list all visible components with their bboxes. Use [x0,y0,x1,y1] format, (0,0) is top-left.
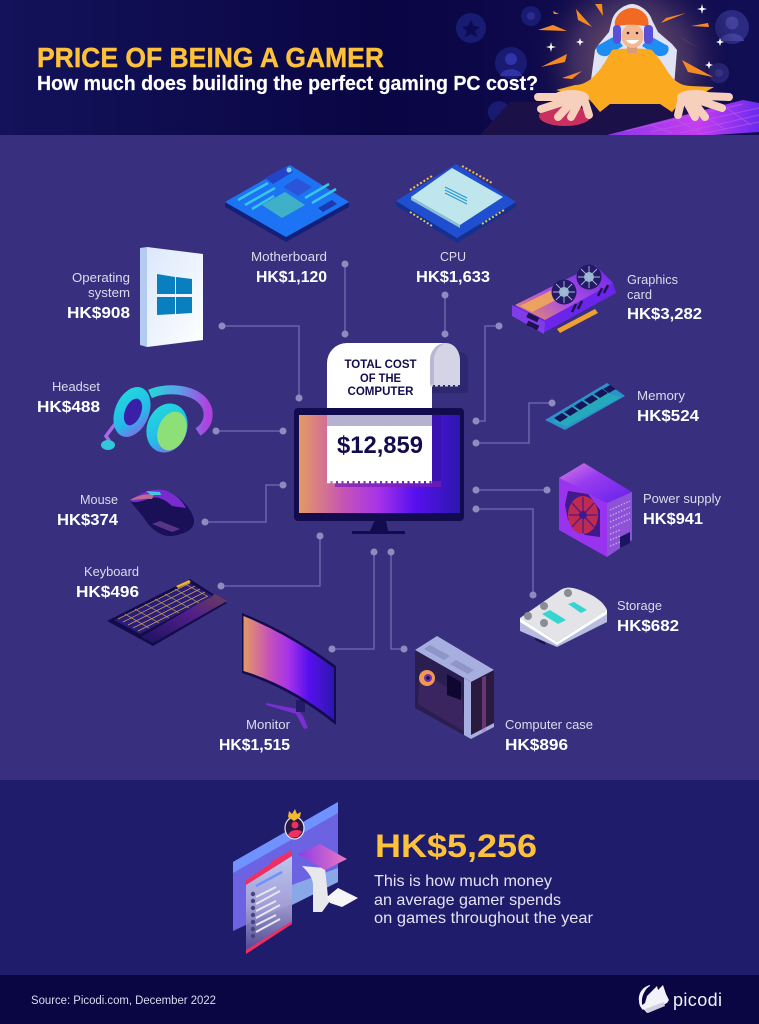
description [374,873,594,927]
item: mouse [57,490,194,536]
description: on games throughout the year [374,910,594,927]
label: Graphics [627,272,678,287]
icon: game store illustration [233,802,358,954]
price: HK$1,120 [256,269,327,286]
label: Monitor [246,717,291,732]
label: Power supply [643,491,721,506]
icon: keyboard [107,579,227,646]
price: HK$682 [617,618,679,635]
avatar with crown [285,817,304,839]
label line two: system [88,285,130,300]
icon: energy rays [538,4,713,79]
item: monitor [219,613,336,754]
panel: header [0,0,759,135]
price: HK$496 [76,584,139,601]
receipt heading: TOTAL COST [344,357,417,371]
label: Memory [637,388,686,403]
icon: motherboard [225,165,349,242]
connector lines [205,264,552,649]
price: HK$1,633 [416,269,490,286]
price: HK$374 [57,512,118,529]
panel: footer [0,975,759,1024]
icon: power supply [559,463,632,557]
icon: chair pads [596,36,669,56]
icon: face [613,8,653,53]
item: computer case [415,636,593,754]
price: HK$488 [37,399,100,416]
receipt shadow on screen [432,415,441,485]
central receipt and monitor [294,343,468,534]
source: Source: Picodi.com, December 2022 [31,995,216,1007]
phone panel [246,850,292,953]
icon: right hand [678,94,729,117]
receipt heading [344,357,417,398]
item: power supply [559,463,721,557]
logo [639,985,722,1013]
item: storage [520,588,679,647]
icon: RAM stick [545,383,625,430]
monitor [294,408,464,521]
receipt top [327,343,446,420]
item: headset [37,379,208,458]
label line two: card [627,287,652,302]
subtitle: How much does building the perfect gaming PC cost? [37,73,538,95]
price: HK$941 [643,511,703,528]
receipt roll [430,343,460,385]
icon: computer case [415,636,494,739]
icon: desk [480,102,700,135]
credit card [298,844,347,870]
paper strip [302,866,338,912]
logo wordmark: picodi [673,990,722,1010]
paper slip [327,888,358,907]
receipt heading: OF THE [360,371,401,385]
panel: yearly game spending [0,780,759,975]
title: PRICE OF BEING A GAMER [37,42,384,73]
icon: headset [101,382,208,458]
item: CPU [396,164,516,286]
label: Mouse [80,492,118,507]
icon: gaming chair [590,4,677,87]
label: Headset [52,379,100,394]
total cost: $12,859 [337,432,423,459]
label: Keyboard [84,564,139,579]
receipt heading: COMPUTER [348,384,414,398]
price: HK$896 [505,737,568,754]
icon: CPU [396,164,516,243]
price: HK$524 [637,408,699,425]
item: memory [545,383,699,430]
browser window [233,802,338,931]
label: Storage [617,598,662,613]
price: HK$908 [67,305,130,322]
item: operating system [67,247,203,347]
label: Motherboard [251,249,327,264]
receipt roll shadow [428,352,468,413]
icon: mouse pad glow [539,106,591,126]
price: HK$1,515 [219,737,290,754]
description: This is how much money [374,873,552,890]
label: Operating [72,270,130,285]
highlight amount: HK$5,256 [375,828,537,864]
item: graphics card [512,264,702,334]
icon: sparkles [546,4,724,69]
label: CPU [440,249,466,264]
icon: curved monitor [242,613,336,729]
item: keyboard [76,564,227,646]
item: motherboard [225,165,349,286]
icon: hoodie [556,48,714,112]
monitor screen [299,415,460,513]
icon: Windows box [140,247,203,347]
monitor stand [352,520,405,534]
receipt lower [327,415,432,481]
background: main panel [0,135,759,780]
icon: background badges [456,6,749,123]
icon: keyboard [607,100,759,135]
icon: left hand [538,94,589,117]
description: an average gamer spends [374,892,561,909]
icon: hard drive [520,588,607,647]
price: HK$3,282 [627,306,702,323]
label: Computer case [505,717,593,732]
icon: mouse [130,490,194,536]
connector dots [202,260,556,652]
icon: graphics card [512,264,616,334]
icon: glow behind gamer [547,0,730,109]
